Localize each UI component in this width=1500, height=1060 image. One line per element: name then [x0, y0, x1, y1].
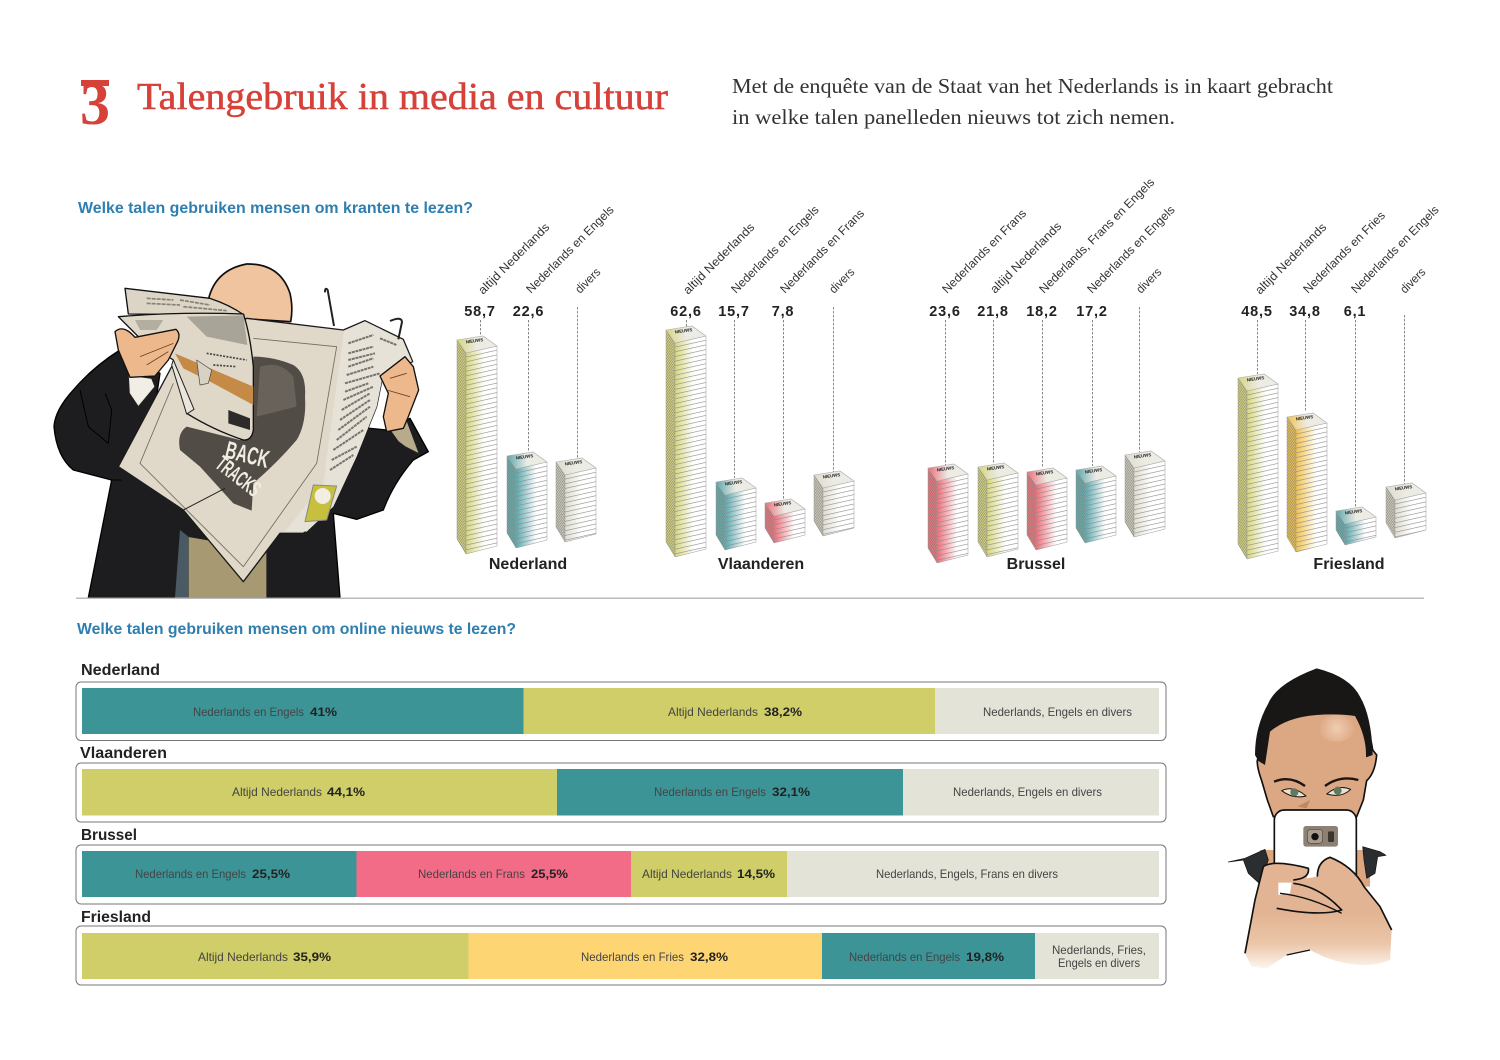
stack 62,6: NIEUWS — [674, 327, 693, 334]
stack 34,8: NIEUWS — [1295, 414, 1314, 421]
label group: 23,6 — [929, 304, 961, 320]
segment: Altijd Nederlands 14,5% — [631, 851, 787, 897]
stack 23,6 — [928, 464, 968, 563]
intro text: Met de enquête van de Staat van het Nederlands is in kaart gebracht — [732, 74, 1333, 98]
segment: Altijd Nederlands 38,2%: 38,2% — [764, 705, 802, 719]
chapter number: 3 — [80, 71, 110, 137]
label group: divers — [1397, 265, 1428, 296]
phone — [1274, 810, 1356, 890]
glasses arms — [325, 289, 402, 339]
bar row: Nederland — [76, 662, 1166, 740]
segment: Nederlands en Engels 41%: Nederlands en Engels — [193, 705, 304, 719]
label group: Nederlands en Engels — [1084, 203, 1178, 296]
stack 7,8 — [765, 499, 805, 543]
segment: Nederlands en Engels 19,8% — [822, 933, 1035, 979]
stack 15,7 — [716, 478, 756, 550]
stack divers — [814, 471, 854, 536]
newspaper main page — [118, 318, 413, 582]
segment: Altijd Nederlands 35,9%: 35,9% — [293, 950, 331, 964]
segment: divers — [1035, 933, 1159, 979]
country label: Brussel — [1007, 556, 1065, 573]
segment: Nederlands en Engels 41% — [82, 688, 524, 734]
segment: Altijd Nederlands 44,1% — [82, 769, 557, 816]
row label: Nederland — [81, 662, 160, 679]
segment: divers: Nederlands, Engels en divers — [953, 785, 1102, 799]
stack 48,5: NIEUWS — [1246, 375, 1265, 382]
label group: altijd Nederlands — [987, 219, 1064, 296]
head — [208, 264, 292, 322]
newspaper photo: BACK — [223, 436, 272, 474]
stack 22,6: NIEUWS — [515, 453, 534, 460]
label group: Nederlands en Engels — [728, 203, 822, 296]
bar row: Brussel — [76, 827, 1166, 904]
segment: divers: Engels en divers — [1058, 956, 1140, 970]
illustration: woman with smartphone — [1228, 668, 1392, 968]
segment: Altijd Nederlands 38,2%: Altijd Nederlands — [668, 705, 758, 719]
segment: Nederlands en Engels 25,5% — [82, 851, 356, 897]
segment: Nederlands en Engels 19,8%: Nederlands en Engels — [849, 950, 960, 964]
segment: Altijd Nederlands 35,9%: Altijd Nederlands — [198, 950, 288, 964]
country label: Friesland — [1313, 556, 1385, 573]
stack divers: NIEUWS — [564, 459, 583, 466]
segment: Nederlands en Engels 41%: 41% — [310, 705, 337, 719]
segment: divers: Nederlands, Engels en divers — [983, 705, 1132, 719]
segment: divers: Nederlands, Engels, Frans en divers — [876, 867, 1058, 881]
label group: Nederlands en Engels — [1348, 203, 1442, 296]
stack chart: Vlaanderen — [666, 203, 867, 573]
segment: Nederlands en Engels 32,1% — [557, 769, 903, 816]
label group: 15,7 — [718, 304, 750, 320]
segment: Nederlands en Engels 25,5%: Nederlands en Engels — [135, 867, 246, 881]
label group: divers — [1133, 265, 1164, 296]
label group: 48,5 — [1241, 304, 1273, 320]
segment: Nederlands en Frans 25,5% — [356, 851, 631, 897]
label group: Nederlands en Fries — [1300, 208, 1388, 296]
stack chart: Nederland — [457, 203, 617, 573]
segment: Altijd Nederlands 44,1%: 44,1% — [327, 785, 365, 799]
label group: altijd Nederlands — [1252, 220, 1329, 297]
segment: Nederlands en Fries 32,8%: 32,8% — [690, 950, 728, 964]
segment: Altijd Nederlands 14,5%: Altijd Nederlands — [642, 867, 732, 881]
bar row: Friesland — [76, 909, 1166, 985]
label group — [929, 175, 1178, 320]
segment: Nederlands en Frans 25,5%: Nederlands en Frans — [418, 867, 525, 881]
newspaper right page — [285, 321, 412, 532]
cuffs — [128, 375, 419, 454]
segment: Altijd Nederlands 35,9% — [82, 933, 468, 979]
hands — [1245, 857, 1392, 968]
stack divers: NIEUWS — [822, 472, 841, 479]
heading: online nieuws: Welke talen gebruiken mensen om online nieuws te lezen? — [77, 621, 516, 638]
segment: Altijd Nederlands 38,2% — [524, 688, 935, 734]
stack 7,8: NIEUWS — [773, 500, 792, 507]
country label: Nederland — [489, 556, 567, 573]
stack 18,2 — [1027, 468, 1067, 550]
stack divers — [556, 458, 596, 542]
label group: altijd Nederlands — [475, 220, 552, 297]
jacket — [54, 350, 428, 598]
label group — [1241, 203, 1442, 320]
label group: Nederlands en Frans — [939, 206, 1029, 296]
stack divers: NIEUWS — [1133, 452, 1152, 459]
segment: divers — [935, 688, 1159, 734]
label group: divers — [826, 265, 857, 296]
left hand — [115, 329, 179, 377]
segment: divers: Nederlands, Fries, — [1052, 943, 1146, 957]
ears and face — [1257, 697, 1377, 817]
segment: Altijd Nederlands 14,5%: 14,5% — [737, 867, 775, 881]
stack 58,7 — [457, 336, 497, 554]
newspaper back fold — [125, 288, 244, 315]
phone camera — [1303, 826, 1338, 847]
row label: Vlaanderen — [80, 745, 167, 762]
segment: Nederlands en Frans 25,5%: 25,5% — [531, 867, 568, 881]
segment: Nederlands en Engels 32,1%: Nederlands en Engels — [654, 785, 766, 799]
segment: divers — [787, 851, 1159, 897]
segment: divers — [903, 769, 1159, 816]
label group: 6,1 — [1344, 304, 1366, 320]
segment: Nederlands en Fries 32,8%: Nederlands en Fries — [581, 950, 684, 964]
label group: 17,2 — [1076, 304, 1108, 320]
stack 34,8 — [1287, 413, 1327, 552]
label group: divers — [572, 265, 603, 296]
label group — [464, 203, 617, 320]
segment: Nederlands en Engels 25,5%: 25,5% — [252, 867, 290, 881]
stack 17,2: NIEUWS — [1084, 467, 1103, 474]
title: Talengebruik in media en cultuur — [137, 76, 668, 118]
intro text — [732, 74, 1333, 129]
segment: Nederlands en Fries 32,8% — [468, 933, 822, 979]
newspaper photo: TRACKS — [211, 451, 266, 502]
stack 6,1 — [1336, 507, 1376, 545]
label group: 22,6 — [513, 304, 544, 320]
label group: altijd Nederlands — [680, 220, 757, 297]
heading: kranten: Welke talen gebruiken mensen om kranten te lezen? — [78, 200, 473, 217]
shoulders — [1228, 847, 1386, 887]
stack 18,2: NIEUWS — [1035, 469, 1054, 476]
stack 15,7: NIEUWS — [724, 479, 743, 486]
stack 17,2 — [1076, 466, 1116, 543]
label group: 62,6 — [670, 304, 702, 320]
label group: Nederlands, Frans en Engels — [1036, 175, 1157, 296]
segment: Nederlands en Engels 32,1%: 32,1% — [772, 785, 810, 799]
label group — [670, 203, 867, 320]
label group: 7,8 — [772, 304, 794, 320]
label group: 34,8 — [1289, 304, 1321, 320]
stack 21,8 — [978, 463, 1018, 557]
stack 58,7: NIEUWS — [465, 337, 484, 344]
stack divers — [1386, 483, 1426, 538]
bar row: Vlaanderen — [76, 745, 1166, 822]
stack 22,6 — [507, 452, 547, 548]
country label: Vlaanderen — [718, 556, 804, 573]
label group: 21,8 — [977, 304, 1009, 320]
shirt and tie — [175, 530, 267, 598]
stack 6,1: NIEUWS — [1344, 508, 1363, 515]
eyes and brows — [1274, 778, 1358, 808]
row label: Friesland — [81, 909, 151, 926]
label group: 18,2 — [1026, 304, 1058, 320]
intro text: in welke talen panelleden nieuws tot zich nemen. — [732, 105, 1175, 129]
stack divers — [1125, 451, 1165, 537]
stack chart: Friesland — [1238, 203, 1442, 573]
label group: 58,7 — [464, 304, 496, 320]
row label: Brussel — [81, 827, 137, 844]
stack divers: NIEUWS — [1394, 484, 1413, 491]
stack 21,8: NIEUWS — [986, 464, 1005, 471]
illustration: man reading newspaper — [54, 264, 428, 598]
right hand — [380, 357, 419, 432]
stack 62,6 — [666, 326, 706, 557]
hair — [1255, 668, 1373, 765]
label group: Nederlands en Engels — [523, 203, 617, 296]
newspaper front fold — [118, 313, 253, 440]
stack 23,6: NIEUWS — [936, 465, 955, 472]
label group: Nederlands en Frans — [777, 206, 867, 296]
stack chart: Brussel — [928, 175, 1178, 573]
newspaper photo — [179, 357, 305, 511]
segment: Nederlands en Engels 19,8%: 19,8% — [966, 950, 1004, 964]
segment: Altijd Nederlands 44,1%: Altijd Nederlands — [232, 785, 322, 799]
stack 48,5 — [1238, 374, 1278, 559]
